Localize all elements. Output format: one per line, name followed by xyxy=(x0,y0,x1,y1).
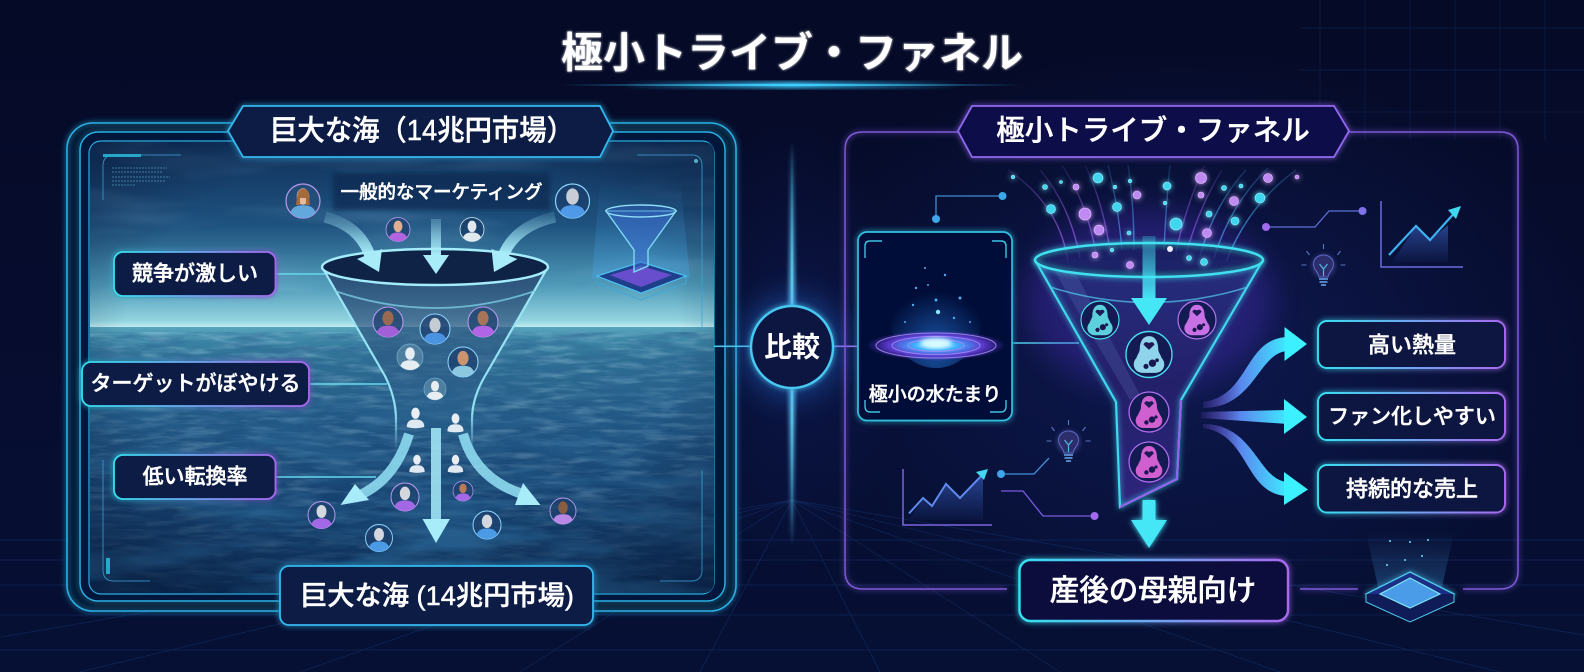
panel: tiny puddle xyxy=(858,232,1012,420)
connector lines xyxy=(275,274,387,477)
comparison axis xyxy=(714,141,858,546)
arrow: out of micro funnel xyxy=(1131,500,1167,548)
outcome: sustained sales: 持続的な売上 xyxy=(1346,476,1478,502)
label: general marketing: 一般的なマーケティング xyxy=(340,182,543,202)
chart: lower growth xyxy=(903,469,992,525)
chart: upper growth xyxy=(1381,201,1463,267)
heading: right hex: 極小トライブ・ファネル xyxy=(996,115,1310,147)
callout: blurred target xyxy=(82,362,309,406)
funnel: micro tribe xyxy=(1024,210,1274,507)
arrows: into funnel xyxy=(325,217,555,274)
label: general marketing xyxy=(333,173,550,210)
outcome: easy to create fans xyxy=(1318,393,1505,440)
callout: fierce competition xyxy=(114,252,276,296)
label: postpartum mothers xyxy=(1020,560,1288,621)
outcome: high enthusiasm xyxy=(1318,321,1505,368)
bottom label: huge ocean xyxy=(280,566,593,625)
callout: low conversion: 低い転換率 xyxy=(142,466,248,488)
particle streams xyxy=(1008,165,1296,262)
callout: low conversion xyxy=(114,455,276,499)
callout: blurred target: ターゲットがぼやける xyxy=(90,372,300,396)
heading: left hex xyxy=(228,106,613,157)
icon: lower bulb xyxy=(1046,420,1090,461)
funnel: ocean xyxy=(322,249,548,448)
right panel frame xyxy=(845,132,1518,589)
outcome: easy to create fans: ファン化しやすい xyxy=(1328,406,1496,428)
label: postpartum mothers: 産後の母親向け xyxy=(1050,574,1256,608)
callout: fierce competition: 競争が激しい xyxy=(132,262,258,286)
bottom label: huge ocean: 巨大な海 (14兆円市場) xyxy=(300,581,574,611)
people: customers xyxy=(286,184,590,553)
icon: hologram platform xyxy=(1366,532,1454,622)
icon: upper bulb xyxy=(1302,244,1346,285)
outcome: sustained sales xyxy=(1318,465,1505,512)
panel frames xyxy=(67,123,736,611)
arrows: outcomes xyxy=(1201,327,1308,505)
heading: left hex: 巨大な海（14兆円市場） xyxy=(270,115,574,147)
ocean photo xyxy=(90,142,714,594)
arrows: out of funnel xyxy=(340,428,540,543)
panel: tiny puddle: 極小の水たまり xyxy=(869,384,1001,406)
badge: comparison xyxy=(751,306,833,388)
heading: right hex xyxy=(958,106,1349,157)
panel: micro tribe funnel xyxy=(845,106,1518,622)
outcome: high enthusiasm: 高い熱量 xyxy=(1368,332,1456,358)
connector lines xyxy=(936,196,1362,516)
HUD overlay xyxy=(103,154,702,581)
badge: comparison: 比較 xyxy=(764,332,820,362)
people: mothers xyxy=(1081,301,1216,482)
icon: mini funnel hologram xyxy=(592,180,690,300)
title: 極小トライブ・ファネル xyxy=(561,30,1023,76)
arrow: into micro funnel xyxy=(1131,236,1167,325)
icon: puddle ripple xyxy=(867,267,1005,368)
panel: huge ocean xyxy=(67,106,736,625)
particle fan xyxy=(1011,172,1299,268)
